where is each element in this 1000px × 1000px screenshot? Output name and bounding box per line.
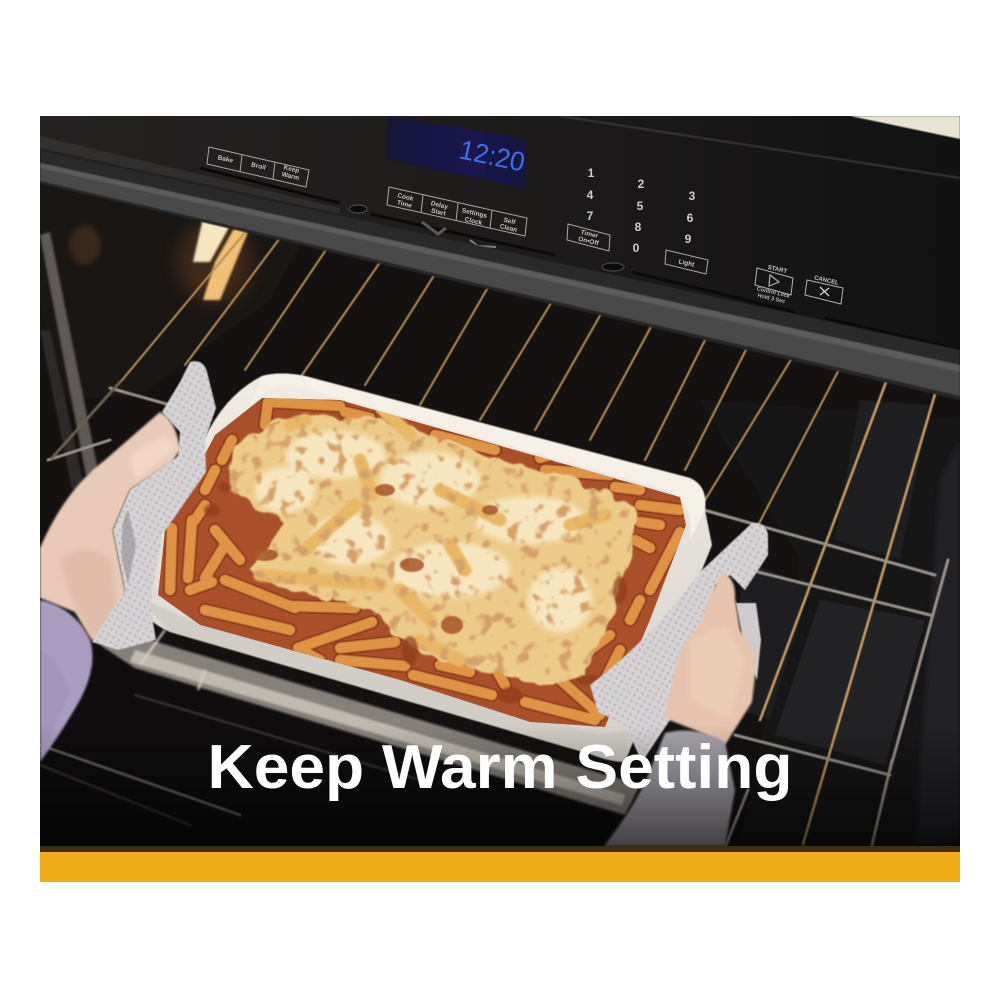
cancel button: CANCEL: [813, 275, 839, 287]
infographic canvas: [40, 116, 960, 882]
light button: [665, 250, 708, 274]
oven photo: [40, 116, 960, 846]
function buttons: Cook Time, Delay Start, Settings Clock, Self Clean: Clock: [464, 216, 483, 227]
function buttons: Cook Time, Delay Start, Settings Clock, Self Clean: Time: [396, 199, 413, 210]
function buttons: Cook Time, Delay Start, Settings Clock, Self Clean: Delay: [430, 200, 449, 211]
blue clock display: 12:20: [457, 135, 528, 178]
number keypad: 1: [588, 166, 595, 180]
right hand: [664, 572, 757, 745]
number keypad: 3: [689, 189, 696, 203]
door handle slots: [200, 168, 960, 350]
warm oven light glow: [69, 218, 253, 304]
number keypad: 2: [638, 177, 645, 191]
mode buttons: Bake, Broil, Keep Warm: Keep: [283, 164, 300, 175]
function buttons: Cook Time, Delay Start, Settings Clock, Self Clean: Self: [503, 217, 517, 226]
number keypad: 7: [587, 209, 594, 223]
right sleeve: [604, 730, 735, 846]
number keypad: 8: [635, 220, 642, 234]
browned cheese mottling: [228, 415, 638, 682]
cancel button: [805, 275, 843, 304]
mode buttons: Bake, Broil, Keep Warm: Broil: [250, 161, 267, 172]
ziti tube shadows: [170, 402, 680, 720]
cheese highlights: [255, 431, 592, 632]
baked pasta: [158, 398, 686, 727]
right towel: [590, 523, 768, 762]
footer yellow bar: [40, 852, 960, 882]
mode buttons: Bake, Broil, Keep Warm: Warm: [281, 171, 300, 182]
timer button: [567, 224, 610, 251]
left towel: [92, 361, 216, 650]
footer dark rule: [40, 846, 960, 852]
light button: Light: [678, 258, 696, 269]
function buttons: Cook Time, Delay Start, Settings Clock, Self Clean: Settings: [461, 207, 488, 220]
sauce base: [158, 398, 686, 727]
browned cheese spots: [252, 484, 498, 634]
oven racks: [40, 212, 948, 845]
function buttons: Cook Time, Delay Start, Settings Clock, Self Clean: Cook: [397, 192, 414, 203]
number keypad: 5: [637, 199, 644, 213]
bottom dark gradient overlay: [40, 725, 960, 846]
browned tubes on top: [260, 408, 605, 660]
number keypad: 9: [685, 232, 692, 246]
left hand: [40, 412, 180, 640]
title: Keep Warm Setting: [208, 733, 792, 802]
ziti tubes: [170, 402, 680, 720]
start button: START: [767, 265, 788, 275]
timer button: Timer: [580, 229, 599, 240]
timer button: On•Off: [577, 236, 600, 247]
door gasket: [40, 150, 960, 400]
start button: [755, 265, 793, 305]
mode buttons: Bake, Broil, Keep Warm: Bake: [217, 154, 234, 165]
number keypad: 4: [587, 188, 594, 202]
function buttons: Cook Time, Delay Start, Settings Clock, Self Clean: Start: [430, 207, 447, 218]
number keypad: 0: [633, 241, 640, 255]
baking dish: [135, 374, 712, 762]
start button: Hold 3 Sec: [757, 293, 786, 305]
rack front rail: [100, 630, 640, 815]
number keypad: 6: [687, 211, 694, 225]
start button: Control Lock: [756, 286, 791, 300]
function buttons: Cook Time, Delay Start, Settings Clock, Self Clean: [387, 187, 527, 236]
oven interior: [40, 116, 960, 846]
control panel: [40, 116, 960, 350]
sauce shadows on pasta: [204, 482, 627, 703]
number keypad: [587, 166, 696, 255]
left sleeve: [40, 600, 92, 762]
cream countertop corner: [850, 116, 960, 139]
melted cheese: [228, 415, 638, 682]
function buttons: Cook Time, Delay Start, Settings Clock, Self Clean: Clean: [499, 223, 518, 234]
mode buttons: Bake, Broil, Keep Warm: [207, 147, 309, 187]
blue clock display: [387, 116, 528, 188]
